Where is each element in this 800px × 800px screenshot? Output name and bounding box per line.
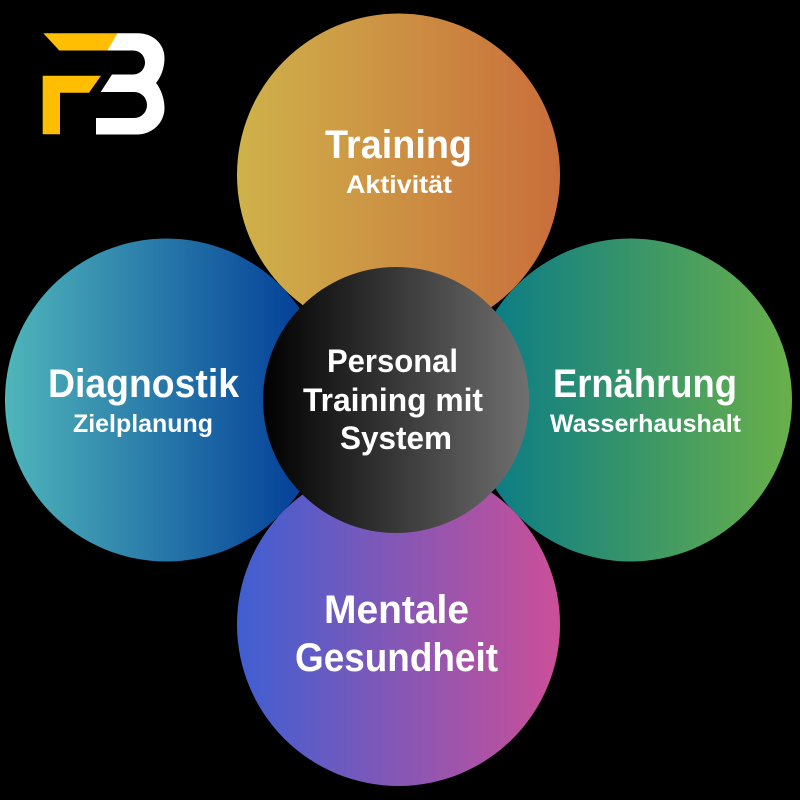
panel: Ernährung xyxy=(469,238,792,562)
heading: Mentale: Mentale xyxy=(324,588,469,632)
subheading: Wasserhaushalt: Wasserhaushalt xyxy=(550,410,742,438)
heading: Diagnostik: Diagnostik xyxy=(48,362,240,406)
title line: System: System xyxy=(340,420,452,456)
heading: Training: Training xyxy=(325,123,472,167)
logo: FB mark xyxy=(43,33,165,134)
subheading: Zielplanung: Zielplanung xyxy=(73,410,213,438)
panel: Diagnostik xyxy=(5,238,328,562)
panel: Training xyxy=(237,14,560,336)
title line: Training mit: Training mit xyxy=(303,382,483,418)
title line: Personal: Personal xyxy=(327,343,458,379)
heading: Ernährung: Ernährung xyxy=(553,362,737,406)
panel: Mentale Gesundheit xyxy=(237,463,560,786)
panel: center hub xyxy=(263,267,529,533)
subheading: Aktivität: Aktivität xyxy=(346,171,453,199)
heading: Gesundheit: Gesundheit xyxy=(295,636,498,680)
